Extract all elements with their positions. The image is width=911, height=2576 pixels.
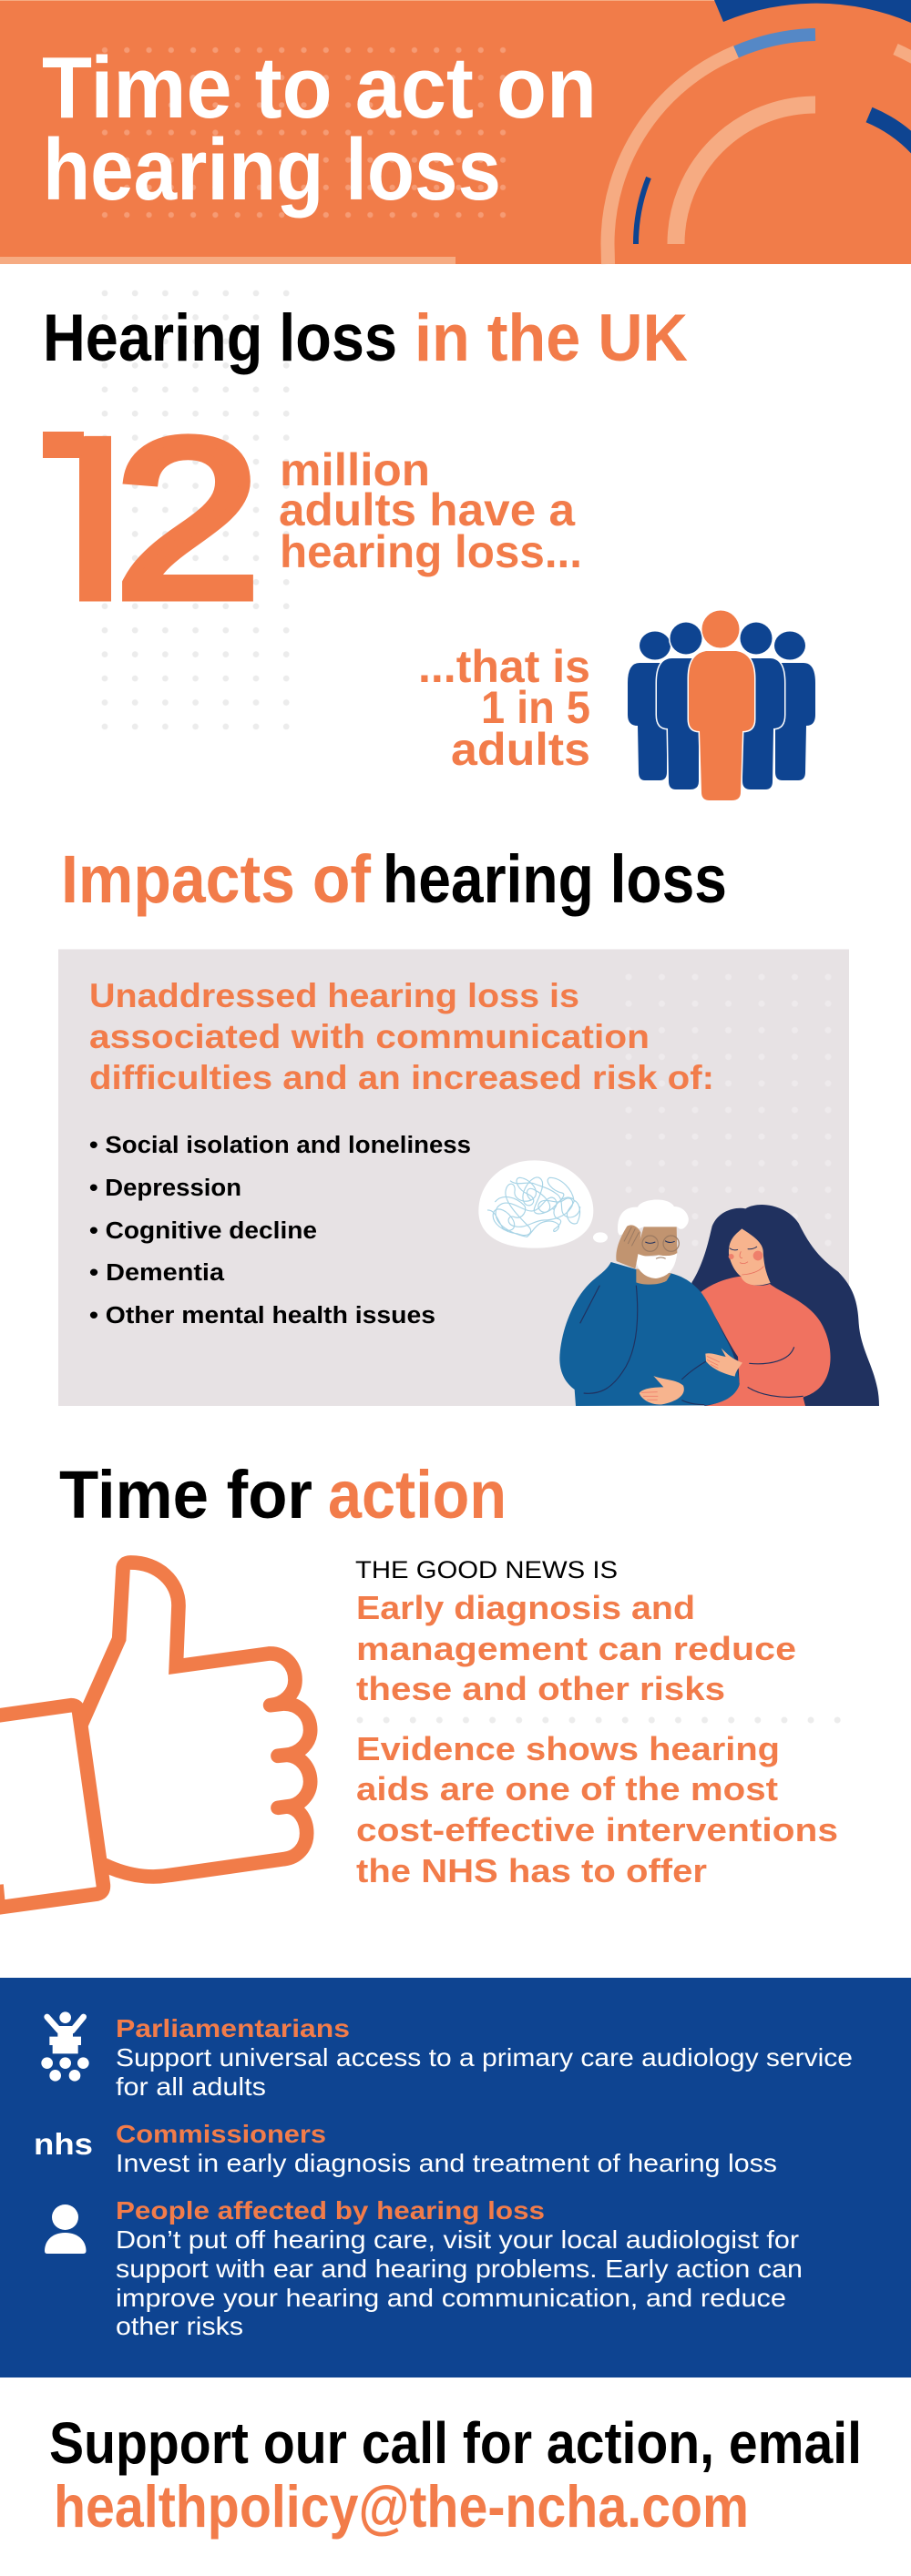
list: risks: • Cognitive decline (89, 1218, 317, 1244)
big number 12: 1 (23, 392, 159, 645)
text: evidence: aids are one of the most (356, 1770, 778, 1807)
heading: time for action (59, 1457, 507, 1532)
text: unaddressed hearing loss: associated with communication (89, 1018, 650, 1055)
list: risks: • Social isolation and loneliness (89, 1133, 471, 1158)
decorative sound-wave arcs (608, 0, 911, 264)
text: parliamentarians (116, 2014, 853, 2101)
call to action footer (49, 2410, 862, 2540)
call to action footer: healthpolicy@the-ncha.com (54, 2473, 749, 2540)
text: evidence: Evidence shows hearing (356, 1730, 780, 1767)
text: unaddressed hearing loss (89, 977, 714, 1096)
list: risks (89, 1133, 471, 1329)
text: commissioners: Invest in early diagnosis and treatment of hearing loss (116, 2149, 777, 2177)
heading: impacts of hearing loss: hearing loss (383, 841, 727, 917)
text: parliamentarians: for all adults (116, 2072, 266, 2101)
heading: time for action: Time for (59, 1457, 312, 1532)
big number 12: 2 (115, 392, 261, 645)
thought bubble with tangled line (478, 1160, 608, 1248)
text: evidence: cost-effective interventions (356, 1811, 838, 1848)
text: early diagnosis: these and other risks (356, 1670, 725, 1707)
icon: person (45, 2204, 86, 2254)
title: hearing loss (43, 121, 501, 219)
text: early diagnosis: management can reduce (356, 1630, 796, 1667)
icon: group of five people (628, 610, 815, 800)
list: risks: • Dementia (89, 1260, 225, 1286)
text: million adults (279, 444, 582, 577)
text: that is 1 in 5 adults: adults (451, 724, 590, 775)
text: people affected: People affected by hearing loss (116, 2196, 545, 2225)
text: that is 1 in 5 adults: 1 in 5 (481, 682, 590, 733)
text: parliamentarians: Support universal access to a primary care audiology service (116, 2043, 853, 2072)
text: commissioners (116, 2120, 777, 2177)
heading: impacts of hearing loss (61, 841, 727, 917)
woman (691, 1205, 879, 1406)
icon: thumbs up (0, 1563, 311, 1908)
panel: impacts (58, 949, 879, 1406)
big number 12 (43, 432, 253, 601)
text: unaddressed hearing loss: Unaddressed hearing loss is (89, 977, 579, 1014)
text: evidence: the NHS has to offer (356, 1852, 707, 1889)
text: people affected: improve your hearing and communication, and reduce (116, 2284, 786, 2312)
text: early diagnosis: Early diagnosis and (356, 1589, 695, 1626)
text: commissioners: Commissioners (116, 2120, 326, 2148)
label: the good news is: THE GOOD NEWS IS (355, 1556, 618, 1583)
text: the good news (346, 1556, 851, 1889)
panel: hearing loss in the UK (23, 281, 815, 800)
text: that is 1 in 5 adults: ...that is (418, 641, 590, 692)
heading: hearing loss in the UK (43, 301, 688, 375)
text: that is 1 in 5 adults (418, 641, 590, 775)
man (559, 1200, 804, 1406)
heading: impacts of hearing loss: Impacts of (61, 841, 371, 917)
text: people affected: Don’t put off hearing care, visit your local audiologist for (116, 2225, 799, 2254)
panel: calls to action (0, 1978, 911, 2377)
text: people affected: other risks (116, 2312, 243, 2340)
text: evidence (356, 1730, 838, 1889)
text: unaddressed hearing loss: difficulties and an increased risk of: (89, 1059, 714, 1096)
icon: nhs: nhs (34, 2127, 93, 2161)
heading: time for action: action (328, 1457, 507, 1532)
heading: hearing loss in the UK: Hearing loss (43, 301, 397, 375)
text: million adults: hearing loss... (280, 526, 582, 577)
text: million adults: adults have a (279, 484, 576, 535)
illustration: elderly man with partner and thought bubble (478, 1160, 879, 1406)
heading: hearing loss in the UK: in the UK (415, 301, 688, 375)
text: people affected (116, 2196, 803, 2340)
text: early diagnosis (356, 1589, 796, 1707)
panel: header banner (0, 0, 911, 264)
title (42, 39, 597, 219)
icon: speaker at podium with audience (41, 2011, 89, 2082)
text: people affected: support with ear and hearing problems. Early action can (116, 2255, 803, 2283)
list: risks: • Depression (89, 1176, 241, 1201)
title: Time to act on (42, 39, 597, 137)
text: parliamentarians: Parliamentarians (116, 2014, 350, 2042)
list: risks: • Other mental health issues (89, 1303, 435, 1329)
text: million adults: million (280, 444, 430, 495)
